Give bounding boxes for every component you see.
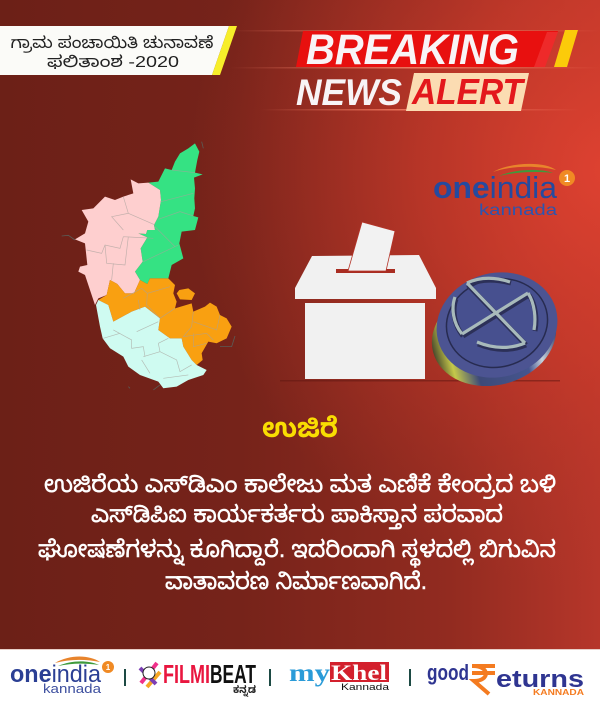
logo: oneindia kannada: kannada	[479, 202, 557, 219]
logo: filmibeat: BEAT	[210, 659, 256, 689]
logo: mykhel: Khel	[331, 660, 387, 685]
logo: goodreturns	[427, 660, 584, 697]
map of Karnataka	[62, 142, 235, 390]
logo: filmibeat: ಕನ್ನಡ	[233, 684, 257, 697]
district boundaries	[87, 170, 220, 378]
logo: goodreturns: good	[427, 660, 469, 685]
logo: oneindia kannada: oneindia	[433, 170, 558, 205]
divider	[409, 669, 411, 686]
logo: filmibeat	[140, 659, 257, 697]
ballot paper	[348, 222, 395, 271]
map region: north-west pink	[75, 179, 161, 305]
logo: oneindia kannada footer: oneindia	[10, 661, 102, 688]
icon: ballot box	[280, 222, 560, 382]
logo: filmibeat: FILMI	[163, 659, 210, 689]
body text: ವಾತಾವರಣ ನಿರ್ಮಾಣವಾಗಿದೆ.	[165, 568, 427, 594]
ballot slot	[336, 269, 395, 273]
header label: election results: ಫಲಿತಾಂಶ -2020	[47, 53, 179, 71]
logo: oneindia kannada: 1	[564, 173, 570, 185]
divider	[269, 669, 271, 686]
body text: ಉಜಿರೆಯ ಎಸ್‌ಡಿಎಂ ಕಾಲೇಜು ಮತ ಎಣಿಕೆ ಕೇಂದ್ರದ ಬಳಿ	[44, 471, 556, 499]
body text: ಎಸ್‌ಡಿಪಿಐ ಕಾರ್ಯಕರ್ತರು ಪಾಕಿಸ್ತಾನ ಪರವಾದ	[91, 501, 503, 530]
symbol shadow	[454, 280, 536, 349]
map region: south mint	[96, 300, 207, 388]
logo: oneindia kannada footer: kannada	[43, 681, 102, 696]
logo: goodreturns: KANNADA	[533, 687, 584, 697]
header label: election results: ಗ್ರಾಮ ಪಂಚಾಯಿತಿ ಚುನಾವಣೆ	[10, 35, 214, 53]
map region: north-east green	[135, 143, 203, 284]
breaking news alert banner	[230, 26, 600, 113]
logo: mykhel: my	[289, 660, 331, 687]
breaking news alert banner: BREAKING	[306, 26, 519, 74]
breaking news alert banner: NEWS	[296, 72, 402, 113]
logo: mykhel	[289, 660, 390, 693]
title: Ujire: ಉಜಿರೆ	[262, 413, 338, 443]
icon: election symbol coin	[420, 259, 569, 400]
header label: election results	[0, 26, 237, 75]
breaking news alert banner: ALERT	[411, 71, 526, 112]
footer logo strip	[0, 649, 600, 706]
body text	[38, 471, 556, 594]
box body	[305, 303, 425, 379]
logo: oneindia kannada	[433, 164, 575, 219]
box lid	[295, 255, 436, 299]
logo: oneindia kannada footer	[10, 656, 114, 696]
divider	[124, 669, 126, 686]
symbol	[453, 278, 535, 347]
body text: ಘೋಷಣೆಗಳನ್ನು ಕೂಗಿದ್ದಾರೆ. ಇದರಿಂದಾಗಿ ಸ್ಥಳದಲ್ಲಿ ಬಿಗುವಿನ	[38, 536, 556, 568]
logo: mykhel: Kannada	[341, 682, 390, 693]
map outliers	[62, 142, 235, 390]
logo: goodreturns: eturns	[496, 666, 584, 693]
map region: central orange	[98, 278, 232, 365]
logo: oneindia kannada footer: 1	[106, 663, 111, 672]
